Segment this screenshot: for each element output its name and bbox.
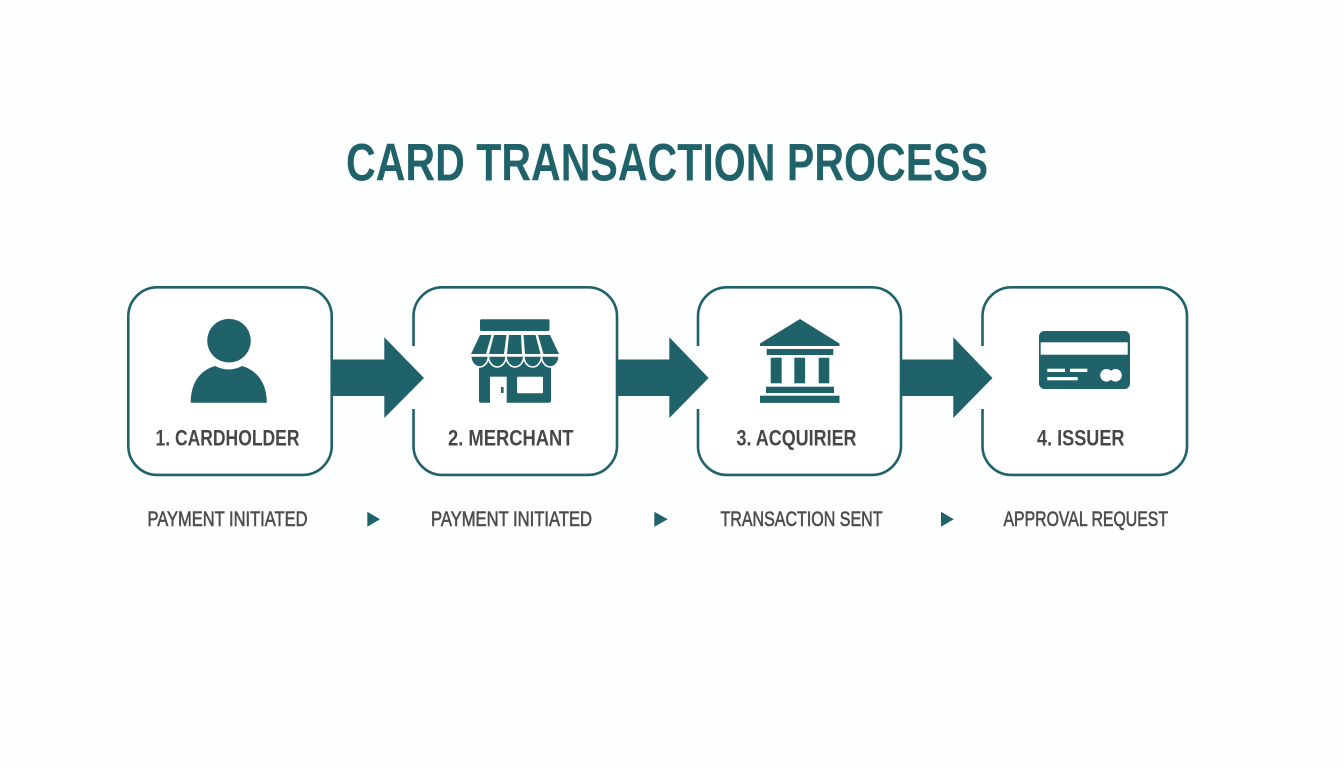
panel: issuer	[982, 287, 1187, 475]
caption: payment initiated second: PAYMENT INITIATED	[431, 508, 592, 531]
caption: transaction sent: TRANSACTION SENT	[720, 508, 883, 531]
small arrow 1	[367, 512, 380, 527]
label: issuer: 4. ISSUER	[1037, 426, 1124, 450]
label: cardholder: 1. CARDHOLDER	[156, 426, 300, 450]
panel: acquirier	[698, 287, 901, 475]
icon: bank	[760, 319, 840, 403]
panel: merchant	[414, 287, 617, 475]
arrow: acquirier to issuer	[901, 337, 992, 418]
arrow: merchant to acquirier	[617, 337, 709, 418]
caption: payment initiated: PAYMENT INITIATED	[148, 508, 308, 531]
icon: credit card	[1039, 331, 1130, 389]
small arrow 3	[941, 512, 954, 527]
icon: storefront	[471, 319, 559, 403]
title: CARD TRANSACTION PROCESS	[346, 134, 988, 192]
label: acquirier: 3. ACQUIRIER	[736, 426, 856, 450]
small arrow 2	[654, 512, 668, 527]
caption: approval request: APPROVAL REQUEST	[1004, 508, 1168, 531]
arrow: cardholder to merchant	[332, 337, 424, 418]
panel: cardholder	[128, 287, 332, 475]
icon: person	[191, 319, 267, 403]
label: merchant: 2. MERCHANT	[448, 426, 574, 450]
